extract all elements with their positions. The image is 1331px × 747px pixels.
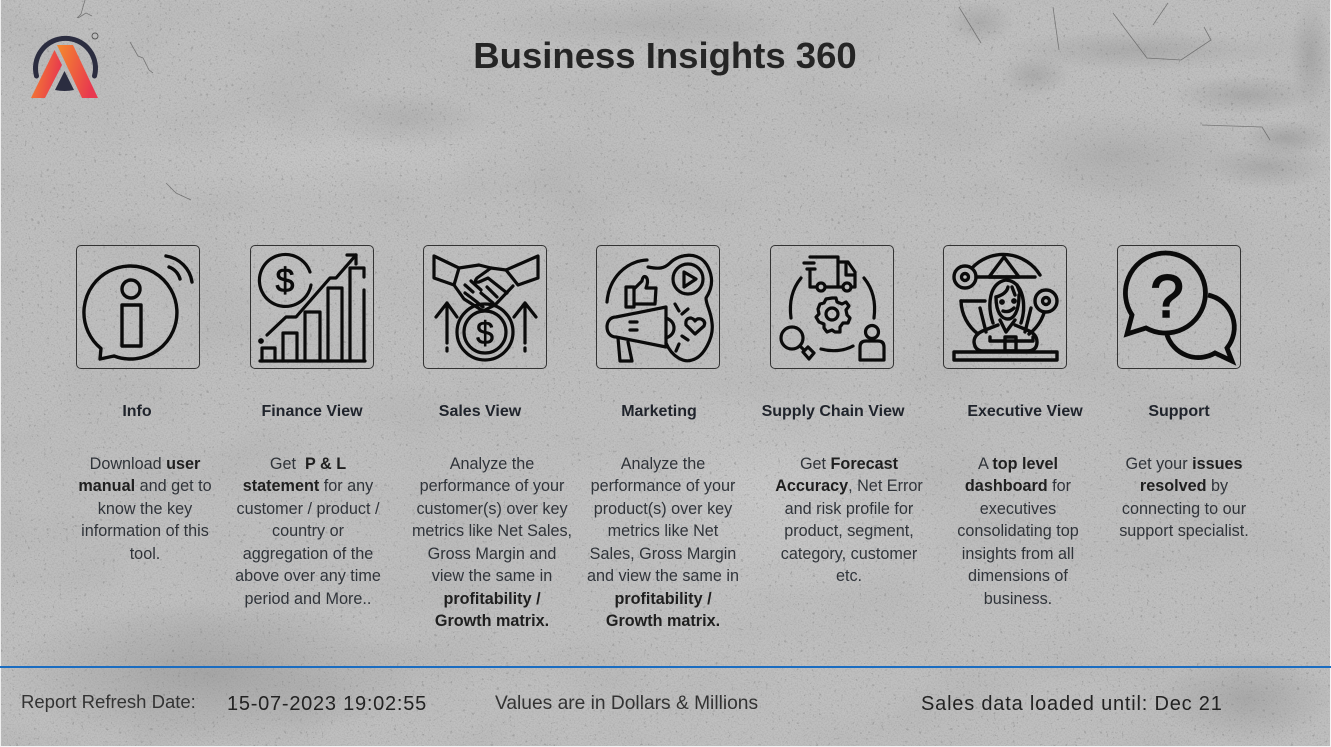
heading: Executive View: [967, 403, 1083, 420]
text block: customer(s) over key: [416, 500, 568, 518]
text block: executives: [980, 500, 1056, 518]
text block: performance of your: [420, 477, 564, 495]
panel: executive view: [943, 245, 1083, 608]
text block: consolidating top: [957, 522, 1079, 540]
text block: dashboard for: [965, 477, 1071, 495]
text block: Get your issues: [1126, 455, 1242, 473]
icon: support question bubbles: ?: [1150, 263, 1184, 330]
text block: [235, 455, 381, 608]
title: Business Insights 360: [473, 35, 857, 76]
text block: profitability /: [614, 590, 712, 608]
text block: Accuracy, Net Error: [775, 477, 923, 495]
text block: know the key: [98, 500, 192, 518]
icon: support question bubbles: [1117, 245, 1241, 369]
text block: Sales, Gross Margin: [590, 545, 736, 563]
heading: Marketing: [621, 403, 697, 420]
icon: marketing megaphone: [596, 245, 720, 369]
text block: Get Forecast: [800, 455, 898, 473]
text block: Analyze the: [621, 455, 705, 473]
footer: sales data note: Sales data loaded until: Dec 21: [921, 693, 1223, 715]
text block: Growth matrix.: [606, 612, 720, 630]
text block: connecting to our: [1122, 500, 1246, 518]
heading: Sales View: [439, 403, 521, 420]
icon: handshake and coin: [423, 245, 547, 369]
icon: handshake and coin: $: [476, 315, 494, 351]
text block: product(s) over key: [594, 500, 732, 518]
text block: metrics like Net: [608, 522, 718, 540]
text block: performance of your: [591, 477, 735, 495]
text block: Download user: [90, 455, 200, 473]
text block: view the same in: [432, 567, 552, 585]
text block: [775, 455, 923, 585]
text block: and view the same in: [587, 567, 739, 585]
heading: Finance View: [261, 403, 363, 420]
text block: category, customer: [781, 545, 917, 563]
text block: product, segment,: [784, 522, 914, 540]
footer: refresh label: Report Refresh Date:: [21, 691, 196, 712]
text block: [1119, 455, 1249, 540]
text block: Growth matrix.: [435, 612, 549, 630]
panel: marketing: [587, 245, 739, 630]
text block: resolved by: [1140, 477, 1228, 495]
text block: Get P & L: [270, 455, 346, 473]
icon: executive with globe: [943, 245, 1067, 369]
panel: supply chain view: [762, 245, 923, 585]
footer: refresh date: 15-07-2023 19:02:55: [227, 693, 427, 715]
text block: [78, 455, 212, 563]
logo: [31, 32, 98, 98]
panel: sales view: [412, 245, 572, 630]
icon: info speech bubble: [76, 245, 200, 369]
text block: business.: [984, 590, 1052, 608]
text block: Gross Margin and: [428, 545, 556, 563]
text block: above over any time: [235, 567, 381, 585]
text block: statement for any: [243, 477, 373, 495]
text block: [587, 455, 739, 630]
icon: finance growth chart: [250, 245, 374, 369]
panel: finance view: [235, 245, 381, 608]
panel: support: [1117, 245, 1249, 540]
text block: Analyze the: [450, 455, 534, 473]
text block: and risk profile for: [785, 500, 913, 518]
text block: country or: [272, 522, 344, 540]
text block: profitability /: [443, 590, 541, 608]
text block: manual and get to: [78, 477, 212, 495]
icon: finance growth chart: $: [276, 262, 295, 300]
footer divider: [0, 666, 1331, 668]
footer: units note: Values are in Dollars & Millions: [495, 693, 758, 714]
text block: metrics like Net Sales,: [412, 522, 572, 540]
text block: [412, 455, 572, 630]
text block: A top level: [978, 455, 1058, 473]
text block: etc.: [836, 567, 862, 585]
text block: [957, 455, 1079, 608]
panel: info: [76, 245, 212, 563]
text block: aggregation of the: [243, 545, 373, 563]
text block: dimensions of: [968, 567, 1068, 585]
text block: period and More..: [245, 590, 371, 608]
text block: tool.: [130, 545, 160, 563]
heading: Support: [1148, 403, 1210, 420]
heading: Supply Chain View: [762, 403, 904, 420]
heading: Info: [122, 403, 152, 420]
text block: customer / product /: [236, 500, 380, 518]
text block: support specialist.: [1119, 522, 1249, 540]
text block: insights from all: [962, 545, 1074, 563]
icon: supply chain cycle: [770, 245, 894, 369]
text block: information of this: [81, 522, 209, 540]
